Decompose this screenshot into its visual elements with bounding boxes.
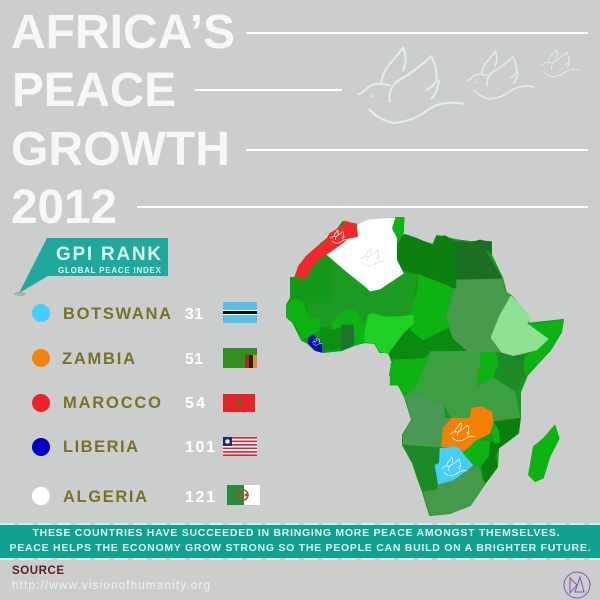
source: http://www.visionofhumanity.org — [12, 580, 210, 592]
row: Botswana: 31 — [185, 306, 203, 323]
west Africa — [287, 218, 415, 353]
row: Liberia: 101 — [185, 439, 215, 456]
source: SOURCE — [12, 565, 64, 577]
GPI rank banner — [14, 238, 168, 296]
icons: doves on highlighted countries — [312, 230, 475, 476]
row: Botswana: BOTSWANA — [63, 305, 171, 323]
icon: three doves — [359, 48, 578, 123]
message band — [0, 524, 600, 559]
row: Zambia: 51 — [185, 351, 203, 368]
row: Liberia — [32, 437, 257, 456]
message band: PEACE HELPS THE ECONOMY GROW STRONG SO THE PEOPLE CAN BUILD ON A BRIGHTER FUTURE. — [10, 542, 591, 554]
continent silhouette base — [287, 218, 563, 515]
east and central Africa — [388, 234, 563, 388]
row: Algeria: ALGERIA — [63, 488, 147, 506]
icon: logo — [564, 572, 590, 598]
map of Africa — [287, 218, 563, 515]
source — [12, 565, 210, 592]
row: Marocco: MAROCCO — [63, 394, 161, 412]
row: Marocco — [32, 394, 255, 412]
row: Botswana — [32, 302, 257, 323]
row: Zambia: ZAMBIA — [62, 350, 135, 368]
GPI rank banner: GLOBAL PEACE INDEX — [58, 266, 162, 275]
message band: THESE COUNTRIES HAVE SUCCEEDED IN BRINGING MORE PEACE AMONGST THEMSELVES. — [32, 527, 560, 539]
row: Algeria: 121 — [185, 489, 215, 506]
title: PEACE — [12, 64, 176, 117]
GPI rank banner: GPI RANK — [56, 244, 161, 265]
title: AFRICA’S — [11, 6, 235, 59]
central and southern Africa — [390, 353, 559, 515]
row: Zambia — [32, 348, 257, 368]
row: Liberia: LIBERIA — [63, 438, 138, 456]
title: GROWTH — [11, 123, 230, 176]
row: Marocco: 54 — [185, 395, 205, 412]
title: 2012 — [11, 181, 117, 234]
row: Algeria — [32, 485, 260, 506]
title — [11, 6, 235, 234]
